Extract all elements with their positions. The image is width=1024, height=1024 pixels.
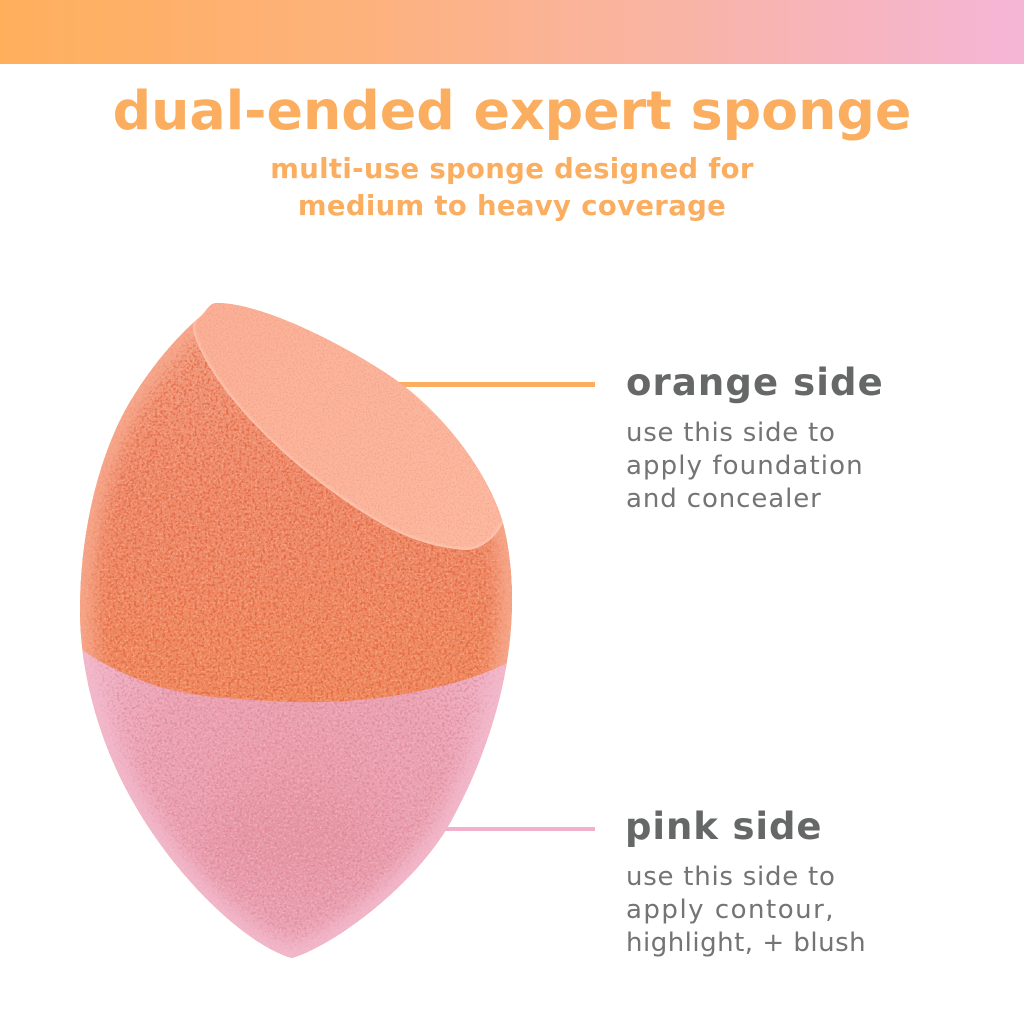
subtitle <box>270 153 754 222</box>
label: pink side heading: pink side <box>625 805 822 848</box>
label: pink side description: use this side to <box>626 862 836 892</box>
sponge: pink part <box>82 650 506 958</box>
connector line: pink side <box>430 827 595 831</box>
label: pink side description: highlight, + blush <box>626 928 866 958</box>
label: pink side description <box>626 862 866 958</box>
label: pink side description: apply contour, <box>626 895 835 925</box>
subtitle: multi-use sponge designed for <box>270 153 754 185</box>
top gradient banner <box>0 0 1024 64</box>
connector line: orange side <box>380 382 595 387</box>
sponge: orange part <box>70 295 520 958</box>
label: orange side heading: orange side <box>626 361 884 404</box>
title: dual-ended expert sponge <box>113 79 911 142</box>
label: orange side description <box>626 418 864 514</box>
illustration: sponge <box>80 303 512 958</box>
label: orange side description: use this side to <box>626 418 836 448</box>
label: orange side description: apply foundation <box>626 451 864 481</box>
label: orange side description: and concealer <box>626 484 822 514</box>
sponge: lighter angled cut face <box>193 303 503 550</box>
subtitle: medium to heavy coverage <box>298 190 726 222</box>
